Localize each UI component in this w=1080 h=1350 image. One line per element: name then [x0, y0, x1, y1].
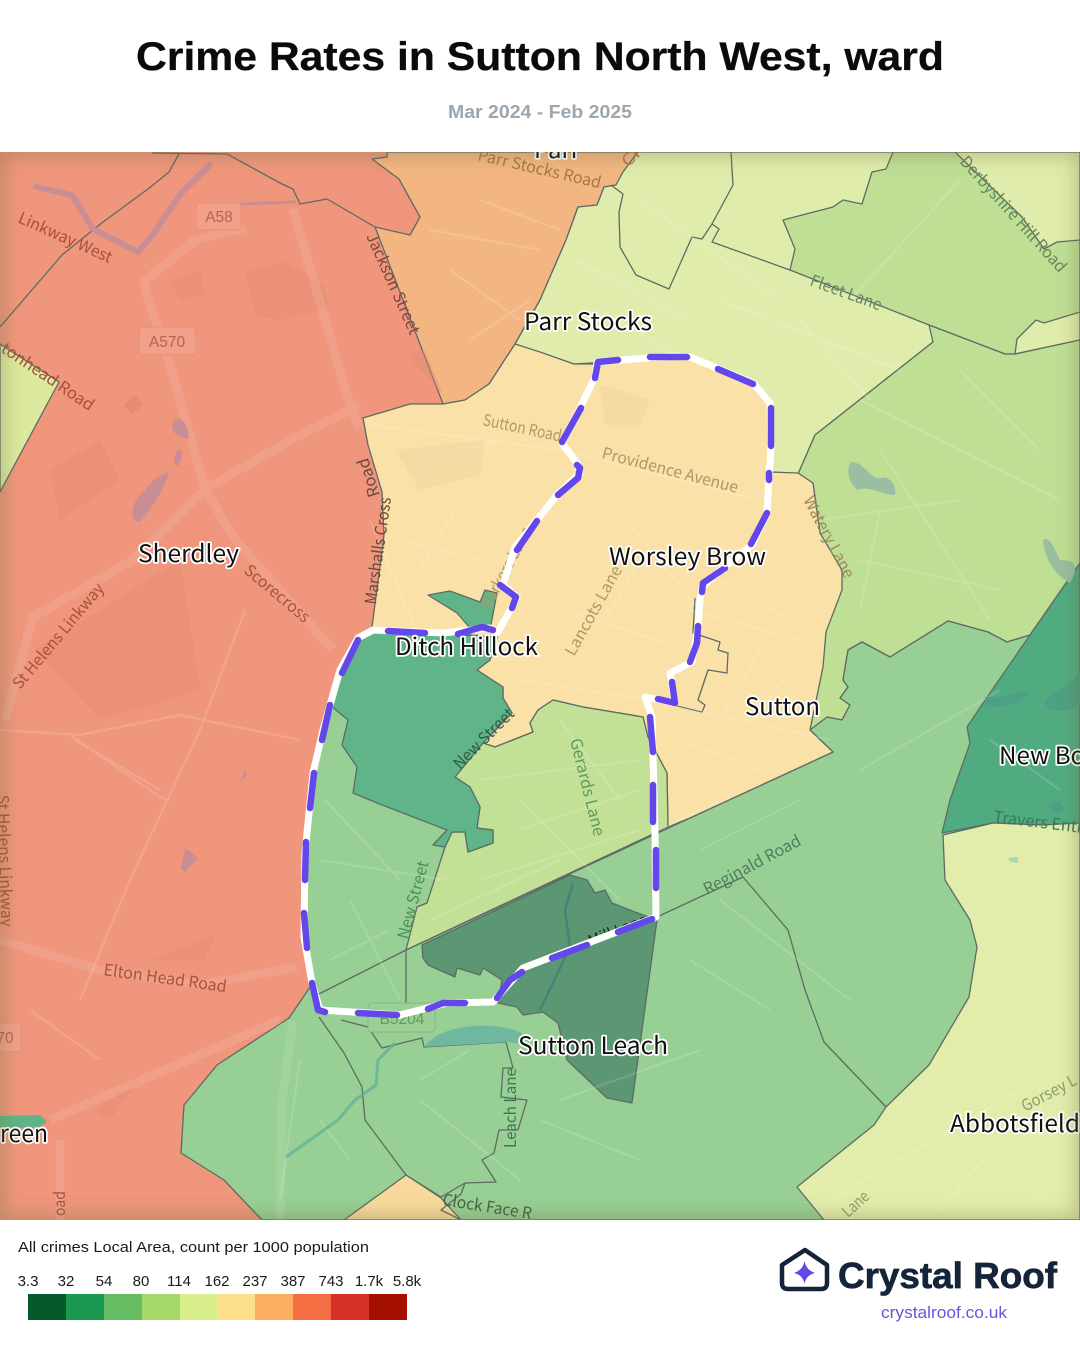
legend values: 54 — [96, 1273, 112, 1290]
icon: house with star — [782, 1250, 827, 1289]
place labels: Ditch Hillock — [395, 627, 538, 662]
legend values: 5.8k — [393, 1273, 422, 1290]
street labels: tonhead Road — [0, 335, 100, 416]
ward boundary dashed outline — [304, 356, 771, 1015]
website: crystalroof.co.uk — [881, 1304, 1008, 1322]
roads, parks and water — [0, 165, 1080, 1220]
legend title: All crimes Local Area, count per 1000 population — [18, 1239, 369, 1256]
place labels: Sutton Leach — [518, 1026, 668, 1061]
road number badges: A570 — [149, 334, 185, 351]
street labels: Barkers Lane — [473, 522, 537, 612]
place labels: Sherdley — [138, 534, 239, 569]
street labels: Linkway West — [15, 205, 117, 268]
street labels: Marshalls Cross — [357, 495, 396, 606]
street labels: Watery Lane — [799, 491, 862, 582]
area: New Bold dark green — [942, 563, 1080, 833]
area: bottom peach fragment — [344, 1175, 461, 1220]
area: bottom-left green fragment — [0, 1115, 47, 1128]
area: Ditch Hillock small patch — [428, 590, 497, 630]
area: eastern green — [790, 325, 1080, 740]
place labels — [0, 130, 1080, 1149]
legend values: 162 — [204, 1273, 230, 1290]
map edge vignette — [0, 148, 1080, 1224]
road number badges: A58 — [205, 209, 233, 226]
place labels: Worsley Brow — [609, 537, 766, 572]
street labels: oad — [46, 1191, 70, 1216]
white casing — [304, 356, 771, 1015]
legend — [18, 1239, 422, 1320]
street labels: Leach Lane — [497, 1068, 521, 1148]
street labels: Jackson Street — [361, 228, 428, 338]
legend values: 1.7k — [355, 1273, 384, 1290]
street labels: Lancots Lane — [557, 560, 627, 659]
area: west pale green fragment — [0, 344, 59, 492]
street labels: Parr Stocks Road — [476, 141, 604, 193]
place labels: reen — [0, 1114, 48, 1149]
street labels: Lane — [835, 1184, 874, 1222]
legend values: 387 — [280, 1273, 306, 1290]
street labels: Sutton Road — [481, 406, 564, 447]
road number badges: B5204 — [380, 1011, 425, 1028]
street labels: Elton Head Road — [102, 956, 228, 997]
legend values: 237 — [242, 1273, 268, 1290]
area: peach north — [372, 152, 638, 404]
Crystal Roof logo — [782, 1250, 1058, 1322]
area: southern green — [181, 563, 1080, 1220]
internal boundaries — [0, 152, 886, 1220]
place labels: Abbotsfield — [950, 1104, 1080, 1139]
place labels: Sutton — [745, 687, 820, 722]
area: Worsley Brow yellow ward — [363, 344, 842, 827]
street labels: New Street — [447, 701, 519, 774]
street labels: Derbyshire Hill Road — [955, 149, 1073, 277]
legend values: 114 — [167, 1273, 191, 1290]
street labels: Ch — [615, 137, 649, 172]
area: Gerards Lane light green — [406, 700, 668, 950]
area: Abbotsfield pale green — [797, 823, 1080, 1220]
legend colour scale — [28, 1294, 407, 1320]
road number badges — [0, 203, 435, 1052]
street labels: St Helens Linkway — [5, 576, 109, 693]
legend values: 743 — [318, 1273, 344, 1290]
title: Crime Rates in Sutton North West, ward — [136, 35, 944, 79]
area: Sutton Leach dark green — [422, 875, 657, 1103]
street labels: Scorecross — [240, 557, 316, 627]
street labels: New Street — [390, 858, 434, 941]
street labels: Providence Avenue — [600, 440, 741, 498]
street labels: Clock Face R — [441, 1186, 534, 1224]
area: north-east green — [783, 152, 1080, 354]
wordmark: Crystal Roof — [838, 1255, 1058, 1296]
street labels: Reginald Road — [698, 828, 805, 899]
area: Ditch Hillock green — [330, 630, 512, 852]
legend values: 32 — [58, 1273, 74, 1290]
place labels: Parr — [534, 130, 581, 165]
area: Parr Stocks pale green — [515, 152, 1080, 474]
purple dashes — [304, 357, 771, 1015]
street labels: Gerards Lane — [565, 735, 613, 838]
street labels: Fleet Lane — [807, 267, 886, 315]
legend values: 3.3 — [18, 1273, 38, 1290]
legend values: 80 — [133, 1273, 149, 1290]
street labels: Road — [350, 455, 385, 501]
date range subtitle: Mar 2024 - Feb 2025 — [448, 102, 632, 122]
street labels: Mill Lane — [585, 909, 649, 949]
place labels: Parr Stocks — [524, 302, 652, 337]
legend values — [18, 1273, 422, 1290]
